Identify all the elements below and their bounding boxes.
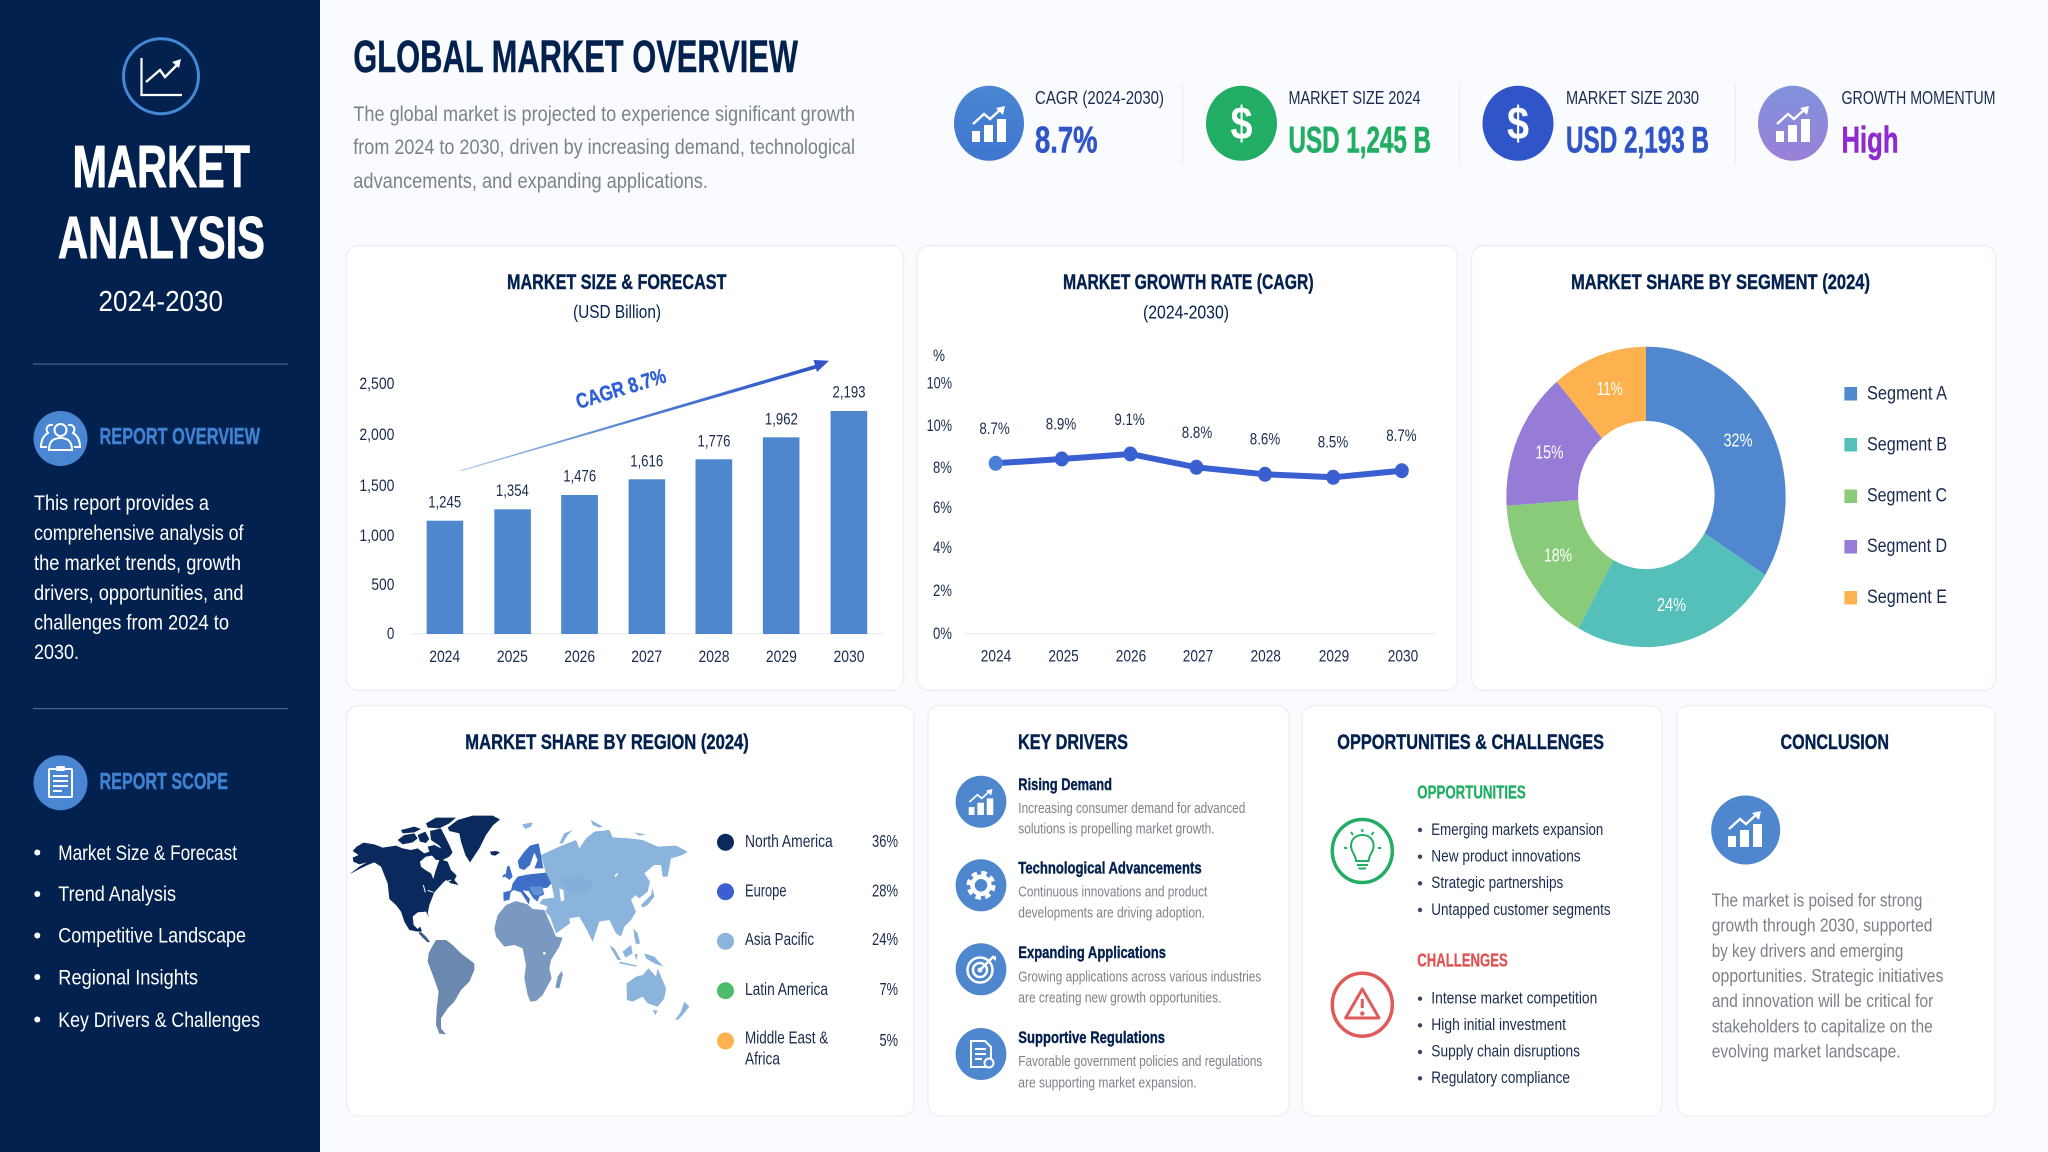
- line value labels: 8.9%: [1046, 414, 1076, 433]
- legend: Segment E: [1867, 587, 1947, 608]
- x axis labels: 2029: [766, 647, 797, 666]
- line value labels: 8.7%: [1386, 426, 1417, 445]
- text: conclusion: opportunities. Strategic initiatives: [1712, 965, 1943, 986]
- world map: [349, 816, 689, 1034]
- subheading: (USD Billion): [573, 301, 661, 322]
- kpi: CAGR: CAGR (2024-2030): [1035, 87, 1164, 108]
- text: conclusion: and innovation will be critical for: [1712, 990, 1933, 1011]
- text: report overview: drivers, opportunities, and: [34, 581, 244, 605]
- driver: supportive regulations: are supporting market expansion.: [1018, 1076, 1197, 1092]
- icon: growth chart: [1711, 796, 1780, 864]
- list: opportunities: Strategic partnerships: [1431, 874, 1563, 892]
- list: challenges: [1418, 990, 1597, 1087]
- driver: rising demand: solutions is propelling market growth.: [1018, 821, 1215, 837]
- y axis labels: [927, 346, 952, 643]
- driver: technological advancements: Continuous innovations and product: [1018, 884, 1207, 900]
- heading: MARKET SHARE BY SEGMENT (2024): [1571, 271, 1870, 294]
- kpi: growth momentum: GROWTH MOMENTUM: [1842, 87, 1996, 108]
- y axis labels: 2,000: [359, 425, 394, 444]
- bar value labels: 1,616: [630, 451, 663, 470]
- heading: MARKET SIZE & FORECAST: [507, 271, 727, 294]
- y axis labels: 6%: [933, 498, 952, 517]
- y axis labels: 4%: [933, 538, 952, 557]
- map: central america: [419, 931, 430, 942]
- donut labels: 24%: [1657, 595, 1686, 615]
- list: challenges: Intense market competition: [1431, 989, 1597, 1007]
- heading: KEY DRIVERS: [1018, 731, 1128, 754]
- x axis labels: 2024: [429, 647, 460, 666]
- list: opportunities: Emerging markets expansion: [1431, 821, 1603, 839]
- bar value labels: 1,962: [765, 409, 798, 428]
- text: conclusion: The market is poised for strong: [1712, 889, 1922, 910]
- list: challenges: Supply chain disruptions: [1431, 1043, 1580, 1061]
- legend: Segment B: [1867, 435, 1947, 456]
- legend: Segment C: [1867, 486, 1947, 507]
- icon: target: [956, 943, 1006, 995]
- heading: challenges: CHALLENGES: [1417, 950, 1508, 971]
- heading: report overview: REPORT OVERVIEW: [100, 423, 260, 449]
- icon: rising demand: [956, 776, 1006, 828]
- legend: regions: North America: [745, 831, 833, 851]
- map: north america: [349, 816, 500, 932]
- sidebar title: ANALYSIS: [58, 205, 265, 271]
- driver: rising demand: [956, 775, 1245, 838]
- list: report scope: Competitive Landscape: [58, 924, 246, 948]
- kpi: market size 2024: [1206, 86, 1431, 161]
- icon: warning triangle: [1332, 973, 1392, 1036]
- donut labels: 32%: [1724, 431, 1752, 451]
- y axis labels: %: [933, 346, 945, 365]
- list: report scope: Regional Insights: [58, 966, 198, 990]
- driver: expanding applications: Growing applications across various industries: [1018, 969, 1261, 985]
- heading: MARKET GROWTH RATE (CAGR): [1063, 271, 1314, 294]
- list: report scope: [34, 841, 260, 1032]
- heading: MARKET SHARE BY REGION (2024): [465, 731, 749, 754]
- text: report overview: This report provides a: [34, 491, 209, 515]
- driver: expanding applications: are creating new growth opportunities.: [1018, 990, 1221, 1006]
- bar chart: [427, 411, 867, 634]
- y axis labels: 2,500: [359, 374, 394, 393]
- panel: market share by segment: [1472, 246, 1996, 690]
- line value labels: [979, 410, 1417, 452]
- donut chart: [1506, 347, 1786, 647]
- legend: regions: 28%: [872, 880, 898, 900]
- driver: rising demand: Rising Demand: [1018, 775, 1112, 794]
- text: report overview: [34, 491, 244, 664]
- text: report overview: challenges from 2024 to: [34, 610, 229, 634]
- text: conclusion: stakeholders to capitalize on the: [1712, 1016, 1933, 1037]
- sidebar title: 2024-2030: [98, 286, 223, 318]
- y axis labels: 8%: [933, 458, 952, 477]
- intro text: advancements, and expanding applications.: [353, 169, 708, 193]
- panel: sidebar: [0, 0, 320, 1152]
- panel: opportunities and challenges: [1302, 706, 1662, 1116]
- kpi: market size 2030: [1482, 86, 1709, 161]
- map: asia pacific: [522, 820, 689, 1020]
- bar value labels: 2,193: [832, 382, 866, 401]
- legend: regions: 24%: [872, 929, 898, 949]
- kpi: growth momentum: [1758, 86, 1996, 161]
- legend: regions: Europe: [745, 880, 786, 900]
- text: report overview: the market trends, growth: [34, 551, 241, 575]
- icon: dollar green: [1206, 86, 1277, 161]
- list: opportunities: Untapped customer segments: [1431, 901, 1611, 919]
- legend: regions: 7%: [880, 979, 898, 999]
- text: conclusion: evolving market landscape.: [1712, 1041, 1901, 1062]
- icon: growth bars purple: [1758, 86, 1828, 161]
- y axis labels: [359, 374, 394, 643]
- map: europe: [503, 843, 551, 904]
- x axis labels: 2026: [1116, 646, 1146, 665]
- panel: conclusion: [1677, 706, 1995, 1116]
- label: CAGR on arrow: CAGR 8.7%: [573, 365, 669, 414]
- legend: regions: [717, 831, 898, 1069]
- driver: supportive regulations: Supportive Regulations: [1018, 1028, 1165, 1047]
- subheading: (2024-2030): [1143, 301, 1229, 322]
- title: GLOBAL MARKET OVERVIEW: [353, 31, 798, 82]
- intro text: The global market is projected to experience significant growth: [353, 102, 855, 126]
- list: report scope: Trend Analysis: [58, 882, 176, 906]
- x axis labels: 2027: [631, 647, 662, 666]
- text: report overview: 2030.: [34, 640, 79, 664]
- x axis labels: 2026: [564, 647, 595, 666]
- icon: lightbulb: [1332, 820, 1392, 882]
- icon: dollar blue: [1482, 86, 1554, 161]
- y axis labels: 1,500: [359, 476, 394, 495]
- kpi: CAGR: [954, 86, 1164, 161]
- y axis labels: 500: [371, 575, 394, 594]
- panel: market size and forecast: [346, 246, 904, 690]
- kpi: CAGR: 8.7%: [1035, 120, 1098, 161]
- legend: Segment D: [1867, 536, 1947, 557]
- driver: technological advancements: [956, 858, 1207, 922]
- heading: CONCLUSION: [1780, 731, 1889, 754]
- sidebar title: MARKET: [72, 134, 250, 200]
- sidebar title: [58, 134, 265, 318]
- legend: regions: Middle East &: [745, 1028, 828, 1048]
- driver: supportive regulations: Favorable government policies and regulations: [1018, 1054, 1262, 1070]
- kpi: market size 2024: MARKET SIZE 2024: [1288, 87, 1420, 108]
- list: opportunities: [1418, 821, 1611, 919]
- driver: technological advancements: developments are driving adoption.: [1018, 905, 1205, 921]
- x axis labels: 2025: [1048, 646, 1079, 665]
- line value labels: 9.1%: [1114, 410, 1145, 429]
- list: report scope: Market Size & Forecast: [58, 841, 237, 865]
- line value labels: 8.8%: [1182, 423, 1212, 442]
- icon: report overview people: [34, 411, 88, 466]
- icon: document: [956, 1028, 1006, 1080]
- x axis labels: 2024: [981, 646, 1011, 665]
- heading: opportunities: OPPORTUNITIES: [1417, 782, 1526, 803]
- intro text: from 2024 to 2030, driven by increasing demand, technological: [353, 135, 855, 159]
- legend: regions: 5%: [880, 1030, 898, 1050]
- x axis labels: [981, 646, 1418, 666]
- donut labels: 18%: [1544, 546, 1572, 566]
- x axis labels: 2028: [698, 647, 730, 666]
- driver: technological advancements: Technological Advancements: [1018, 858, 1202, 877]
- line value labels: 8.5%: [1318, 432, 1348, 451]
- driver: expanding applications: Expanding Applications: [1018, 943, 1166, 962]
- kpi: growth momentum: High: [1842, 120, 1898, 161]
- bar value labels: 1,245: [428, 492, 461, 511]
- list: report scope: Key Drivers & Challenges: [58, 1008, 260, 1032]
- icon: gear: [956, 859, 1006, 911]
- arrow: CAGR trend: [460, 360, 829, 471]
- text: conclusion: [1712, 890, 1943, 1062]
- panel: key drivers: [928, 706, 1289, 1116]
- x axis labels: 2028: [1250, 646, 1281, 665]
- line value labels: 8.7%: [979, 419, 1010, 438]
- panel: market share by region: [347, 706, 914, 1116]
- map: africa: [494, 901, 563, 1002]
- y axis labels: 0: [387, 624, 394, 643]
- text: report overview: comprehensive analysis of: [34, 521, 244, 545]
- icon: dollar blue: $: [1507, 97, 1529, 149]
- heading: OPPORTUNITIES & CHALLENGES: [1337, 731, 1604, 754]
- legend: regions: 36%: [872, 831, 898, 851]
- bar value labels: 1,776: [698, 431, 730, 450]
- x axis labels: [429, 647, 864, 666]
- driver: rising demand: Increasing consumer demand for advanced: [1018, 801, 1245, 817]
- x axis labels: 2030: [1388, 646, 1418, 665]
- legend: regions: Latin America: [745, 979, 828, 999]
- icon: growth bars: [954, 86, 1024, 161]
- bar value labels: 1,354: [496, 481, 529, 500]
- list: opportunities: New product innovations: [1431, 847, 1581, 865]
- icon: report scope clipboard: [34, 755, 88, 810]
- list: challenges: High initial investment: [1431, 1016, 1566, 1034]
- kpi: market size 2024: USD 1,245 B: [1288, 120, 1431, 161]
- line chart: [989, 446, 1409, 485]
- donut labels: [1535, 379, 1752, 615]
- x axis labels: 2030: [834, 647, 864, 666]
- y axis labels: 10%: [927, 416, 952, 435]
- driver: expanding applications: [956, 943, 1261, 1006]
- y axis labels: 0%: [933, 624, 952, 643]
- list: challenges: Regulatory compliance: [1431, 1069, 1570, 1087]
- y axis labels: 10%: [927, 373, 952, 392]
- x axis labels: 2029: [1319, 646, 1349, 665]
- heading: report scope: REPORT SCOPE: [100, 768, 228, 794]
- x axis labels: 2025: [497, 647, 528, 666]
- legend: regions: Africa: [745, 1049, 780, 1069]
- intro text: [353, 102, 855, 193]
- bar value labels: [428, 382, 866, 512]
- legend: [1844, 384, 1947, 608]
- kpi: market size 2030: MARKET SIZE 2030: [1566, 87, 1699, 108]
- text: conclusion: by key drivers and emerging: [1712, 940, 1903, 961]
- map: south america: [428, 940, 474, 1034]
- y axis labels: 1,000: [359, 526, 394, 545]
- bar value labels: 1,476: [563, 466, 596, 485]
- icon: trend line in circle: [124, 39, 198, 114]
- text: conclusion: growth through 2030, supported: [1712, 914, 1932, 935]
- legend: Segment A: [1867, 384, 1947, 405]
- icon: dollar green: $: [1230, 97, 1252, 149]
- line value labels: 8.6%: [1250, 429, 1280, 448]
- donut labels: 15%: [1535, 443, 1563, 463]
- legend: regions: Asia Pacific: [745, 929, 814, 949]
- y axis labels: 2%: [933, 581, 952, 600]
- panel: market growth rate: [917, 246, 1458, 690]
- map: hudson bay and lakes: [396, 856, 451, 920]
- x axis labels: 2027: [1183, 646, 1213, 665]
- driver: supportive regulations: [956, 1028, 1262, 1092]
- donut labels: 11%: [1597, 379, 1623, 399]
- kpi: market size 2030: USD 2,193 B: [1566, 120, 1709, 161]
